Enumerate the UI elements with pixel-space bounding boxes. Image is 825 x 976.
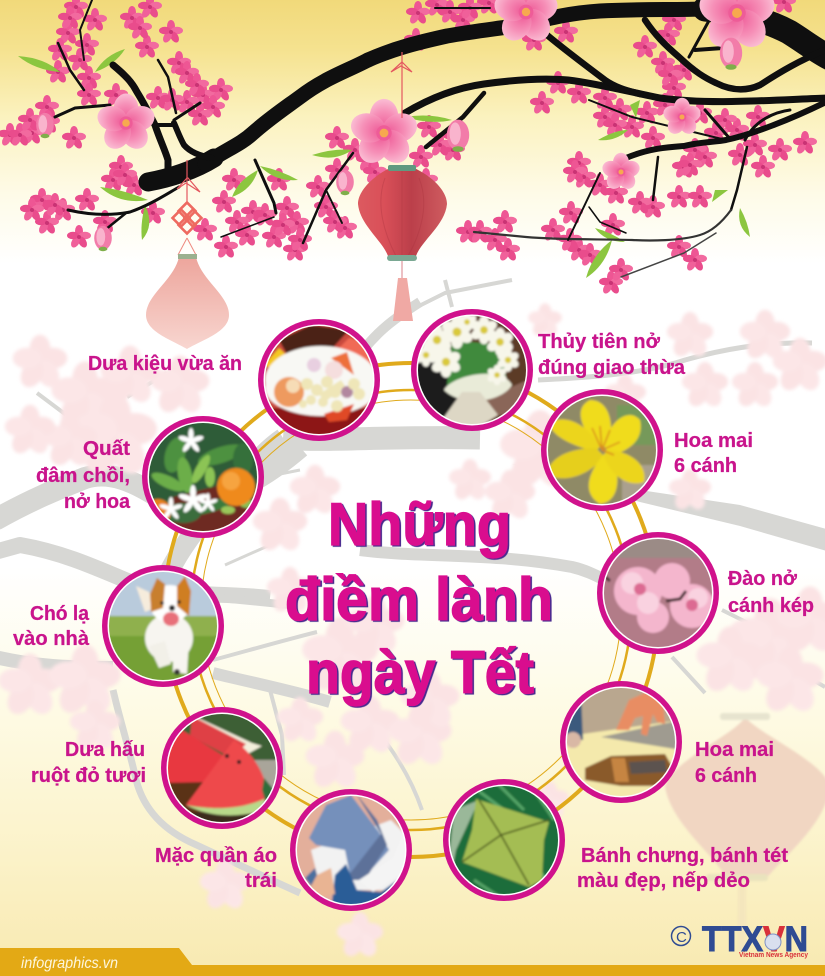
photo: kumquat tree [142,416,264,538]
blossoms: upper left cluster [0,0,233,249]
photo: pickled scallions [258,319,380,441]
label: banh chung: màu đẹp, nếp dẻo [577,870,750,892]
hanging red lantern [358,52,447,321]
label: narcissus: Thủy tiên nở [538,331,661,353]
label: kumquat: đâm chồi, [36,465,130,487]
faded background blossoms [0,303,825,960]
label: narcissus [538,331,686,379]
footer band [0,948,825,976]
label: watermelon: ruột đỏ tươi [31,765,146,787]
hanging pale lantern with knot [146,160,229,349]
peach tree branches [55,0,825,277]
footer band: infographics.vn [21,955,118,972]
label: wallet [695,739,774,787]
green leaves [18,49,750,278]
label: clothes: Mặc quần áo [155,845,277,867]
blossoms: right cluster [456,0,817,295]
label: peach blossom [728,568,814,617]
photo: running dog [102,565,224,687]
label: kumquat: Quất [83,438,130,460]
photo: inside-out clothes [290,789,412,911]
label: banh chung: Bánh chưng, bánh tét [581,845,788,867]
label: dog [13,603,90,650]
photo: narcissus [411,309,533,431]
faded right branch [512,464,825,552]
label: kumquat [36,438,131,513]
TTXVN logo: Vietnam News Agency [739,950,809,959]
label: dog: Chó lạ [30,603,90,625]
label: apricot blossom: 6 cánh [674,455,737,477]
label: watermelon: Dưa hấu [65,739,145,761]
label: clothes [155,845,277,892]
label: pickled scallions: Dưa kiệu vừa ăn [88,353,242,375]
photo: peach blossom [597,532,719,654]
photo: wallet on the ground [560,681,682,803]
gold rings [164,363,658,857]
label: kumquat: nở hoa [64,491,131,513]
label: narcissus: đúng giao thừa [538,357,686,379]
photo: banh chung [443,779,565,901]
label: peach blossom: cánh kép [728,595,814,617]
photo: yellow apricot blossom [541,389,663,511]
blossoms: centre cluster [193,0,578,262]
label: clothes: trái [245,870,277,892]
label: banh chung [577,845,788,892]
TTXVN logo: C [676,929,687,946]
title: Những [328,491,511,558]
label: wallet: Hoa mai [695,739,774,761]
faded lantern: lower right [665,713,825,952]
label: apricot blossom: Hoa mai [674,430,753,452]
label: watermelon [31,739,146,787]
faded background branches [0,280,825,893]
title [285,491,553,706]
title: ngày Tết [306,639,534,706]
label: peach blossom: Đào nở [728,568,798,590]
title: điềm lành [285,566,553,633]
label: apricot blossom [674,430,753,477]
large peach blossoms and buds [36,0,779,251]
label: dog: vào nhà [13,628,90,650]
TTXVN logo: TTXVN [702,920,808,959]
label: wallet: 6 cánh [695,765,757,787]
photo: watermelon [160,707,283,829]
